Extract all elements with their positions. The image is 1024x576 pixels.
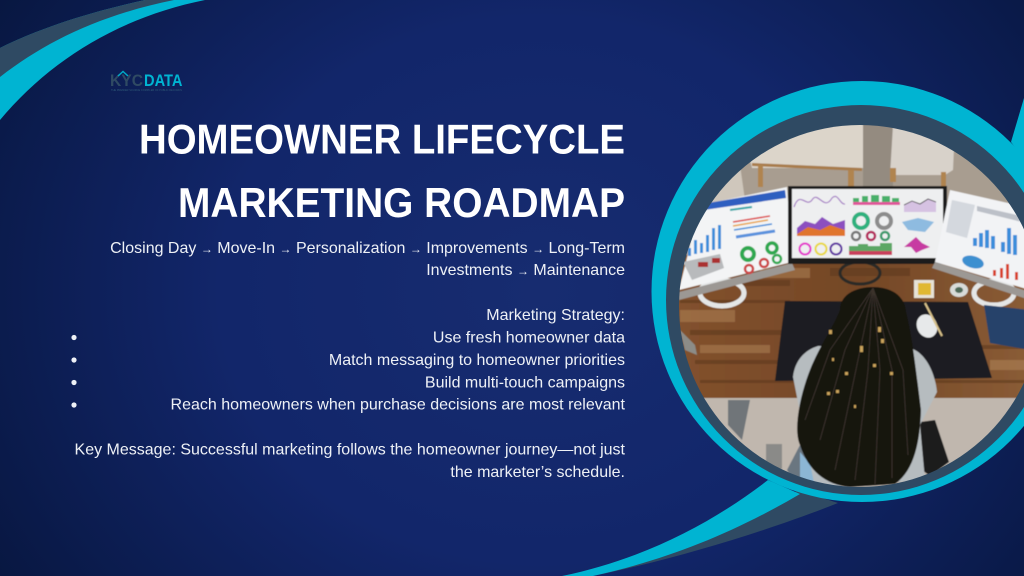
- floor and furniture: [686, 125, 1010, 256]
- logo: KYC Data: KYC: [110, 72, 143, 90]
- right monitor: [932, 190, 1024, 300]
- left monitor: [679, 187, 795, 300]
- person: braided hair: [797, 287, 921, 487]
- centre monitor: [788, 186, 947, 264]
- marketing strategy bullet list: Build multi-touch campaigns: [425, 374, 625, 392]
- key message: Key Message: Successful marketing follows the homeowner journey—not just: [75, 442, 626, 458]
- lifecycle stages text: [110, 240, 625, 279]
- title: HOMEOWNER LIFECYCLE: [139, 116, 625, 162]
- desk items: [680, 262, 1024, 381]
- logo: KYC Data: THE PREMIER SOURCE COMPILER OF PUBLIC RECORDS: [111, 88, 182, 92]
- swoosh: top-left corner: [0, 0, 205, 120]
- person: grey top and shoulders: [793, 346, 937, 488]
- logo: KYC Data: [110, 72, 183, 92]
- key message: the marketer’s schedule.: [450, 464, 625, 481]
- marketing strategy bullet list: Reach homeowners when purchase decisions are most relevant: [171, 396, 626, 414]
- lifecycle stages text: Closing Day → Move-In → Personalization → Improvements → Long-Term: [110, 240, 625, 257]
- swoosh: bottom tail under the circle: [562, 480, 838, 576]
- photo: analyst at desk with three dashboard monitors: [670, 120, 1024, 493]
- marketing strategy bullet list: Match messaging to homeowner priorities: [329, 352, 625, 369]
- photo frame: teal and slate rings: [652, 81, 1024, 502]
- key message: [75, 442, 626, 481]
- title: [139, 116, 625, 226]
- logo: KYC Data: DATA: [144, 72, 183, 90]
- lifecycle stages text: Investments → Maintenance: [426, 262, 625, 279]
- marketing strategy heading: Marketing Strategy:: [486, 307, 625, 324]
- swoosh: right edge behind the circle: [1011, 98, 1024, 160]
- marketing strategy bullet list: [71, 330, 626, 414]
- marketing strategy bullet list: Use fresh homeowner data: [433, 330, 625, 346]
- wooden desk: [670, 255, 1024, 399]
- chair and floor below desk: [704, 397, 1016, 487]
- title: MARKETING ROADMAP: [178, 179, 625, 226]
